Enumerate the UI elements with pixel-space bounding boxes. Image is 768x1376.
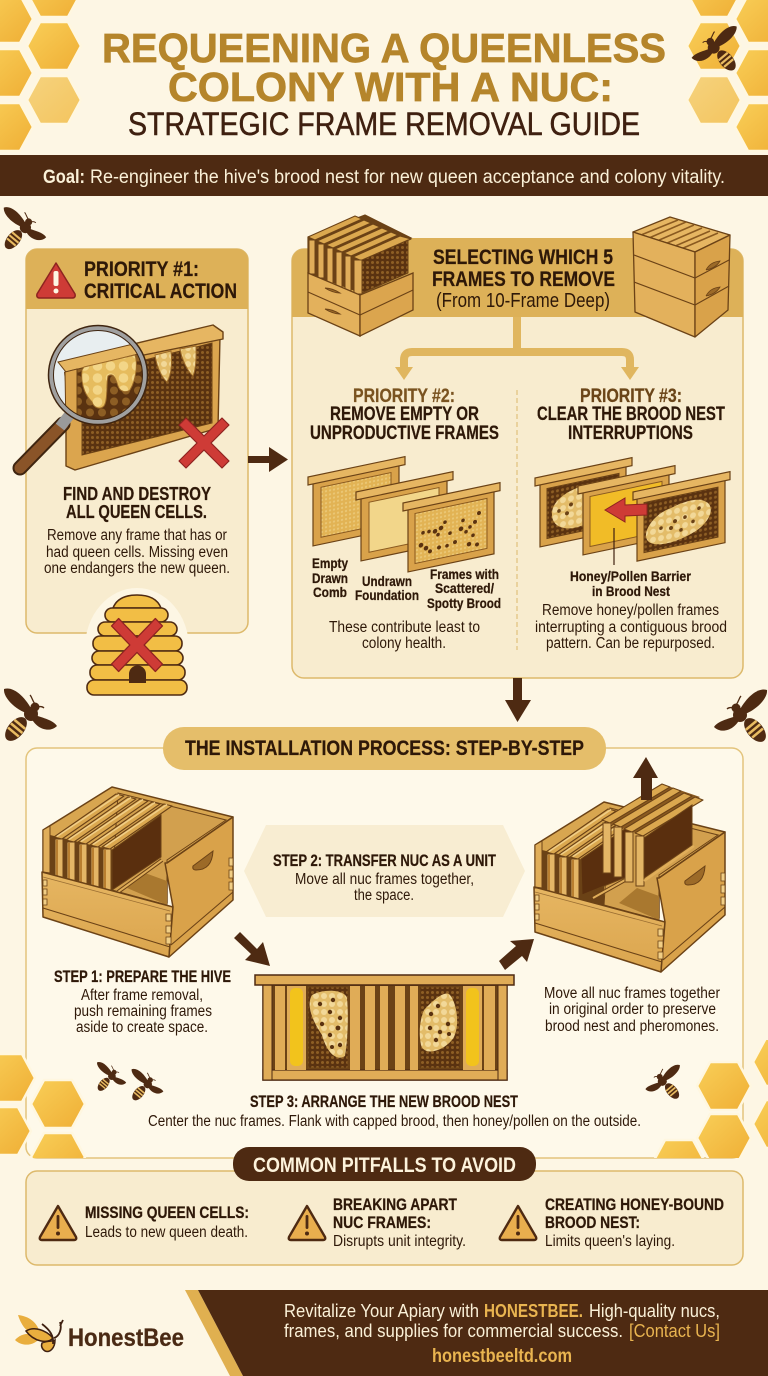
priority 2 heading: PRIORITY #2:: [353, 386, 455, 407]
priority 2 body text: These contribute least to: [329, 619, 480, 636]
header title: SELECTING WHICH 5: [433, 246, 613, 269]
honeycomb: top left: [0, 0, 81, 151]
icon: bee right lower: [645, 1065, 682, 1101]
priority 1 body text: one endangers the new queen.: [44, 560, 230, 577]
honeycomb: bottom left: [0, 1055, 86, 1158]
title: COLONY WITH A NUC:: [168, 64, 613, 110]
priority 1 body text: had queen cells. Missing even: [46, 544, 228, 561]
icon: bee left: [1, 688, 57, 745]
goal banner: [0, 155, 768, 196]
logo: HonestBee: HonestBee: [68, 1324, 184, 1352]
footer text: HONESTBEE.: [484, 1300, 583, 1321]
footer text: [284, 1300, 720, 1367]
step 3 text: [148, 1092, 641, 1130]
priority 1 body text: [44, 527, 230, 577]
panel: priority 1: [20, 249, 248, 633]
panel header: [26, 249, 248, 309]
illustration: spotty brood frame: [403, 483, 500, 573]
priority 2 frame labels: Frames with: [430, 567, 499, 582]
red arrow on barrier frame: [605, 498, 647, 522]
callout: step 2 hexagon: [244, 825, 525, 917]
priority 1 headline: [63, 483, 212, 522]
priority 3 heading: PRIORITY #3:: [580, 386, 682, 407]
title: STRATEGIC FRAME REMOVAL GUIDE: [128, 106, 640, 142]
icon: bee top right: [692, 26, 739, 74]
goal banner: Re-engineer the hive's brood nest for new queen acceptance and colony vitality.: [90, 167, 725, 188]
pitfall 1: [40, 1204, 249, 1241]
footer text: frames, and supplies for commercial success.: [284, 1320, 623, 1341]
step 3 text: Center the nuc frames. Flank with capped brood, then honey/pollen on the outside.: [148, 1113, 641, 1130]
pitfall 3: CREATING HONEY-BOUND: [545, 1196, 724, 1214]
priority 3 body text: pattern. Can be repurposed.: [546, 635, 715, 652]
title: [102, 25, 666, 142]
priority 3 caption: Honey/Pollen Barrier: [570, 569, 692, 584]
step 1 text: [54, 967, 231, 1036]
priority 1 headline: FIND AND DESTROY: [63, 483, 212, 504]
priority 3 caption: in Brood Nest: [592, 584, 670, 599]
illustration: honey barrier frame: [578, 466, 675, 556]
priority 3 body text: [535, 602, 727, 652]
step 1 text: aside to create space.: [76, 1019, 208, 1036]
header title: [432, 246, 615, 312]
priority 2 frame labels: Empty: [312, 556, 348, 571]
panel header: [292, 238, 743, 317]
priority 2 heading: REMOVE EMPTY OR: [330, 404, 479, 425]
illustration: undrawn foundation frame: [356, 472, 453, 562]
arrow: down-right to brood nest: [234, 932, 270, 966]
priority 3 heading: INTERRUPTIONS: [568, 423, 693, 444]
arrow: to selecting frames: [248, 447, 288, 472]
pitfall 1: Leads to new queen death.: [85, 1224, 248, 1241]
footer text: Revitalize Your Apiary with: [284, 1300, 479, 1321]
pitfall 2: [289, 1196, 466, 1250]
callout: step 2 hexagon: Move all nuc frames together,: [295, 871, 474, 888]
step 2 detail text: [544, 985, 720, 1035]
callout: step 2 hexagon: STEP 2: TRANSFER NUC AS A UNIT: [273, 851, 496, 870]
callout: step 2 hexagon: the space.: [354, 887, 414, 904]
panel: selecting which 5 frames: [292, 215, 743, 678]
footer text: High-quality nucs,: [589, 1300, 720, 1321]
step 2 detail text: Move all nuc frames together: [544, 985, 720, 1002]
icon: bee top left: [1, 207, 46, 252]
priority 1 heading: CRITICAL ACTION: [84, 280, 237, 303]
arrow: up-right to hive: [499, 939, 534, 970]
priority 2 body text: colony health.: [362, 635, 446, 652]
priority 2 frame labels: Spotty Brood: [427, 596, 501, 611]
illustration: step 3 hive box with lifted frames: [534, 784, 725, 972]
pitfall 2: NUC FRAMES:: [333, 1214, 431, 1232]
illustration: frame with queen cells: [58, 325, 223, 470]
arrow: down to installation: [505, 678, 531, 722]
icon: red warning triangle: [37, 263, 75, 298]
pitfall 3: BROOD NEST:: [545, 1214, 640, 1232]
illustration: empty drawn comb frame: [308, 457, 405, 547]
installation title pill: [163, 727, 606, 770]
pitfalls title pill: COMMON PITFALLS TO AVOID: [253, 1154, 516, 1177]
priority 3 heading: [537, 386, 725, 444]
priority 2 frame labels: Comb: [313, 585, 347, 600]
priority 3 caption: [570, 569, 692, 599]
priority 2 heading: [310, 386, 499, 444]
priority 2 frame labels: [312, 556, 501, 611]
honeycomb: top right: [687, 0, 768, 151]
logo: HonestBee: [15, 1315, 184, 1352]
illustration: arranged brood nest box: [255, 975, 514, 1080]
header title: FRAMES TO REMOVE: [432, 268, 615, 291]
step 3 text: STEP 3: ARRANGE THE NEW BROOD NEST: [250, 1092, 518, 1111]
priority 2 frame labels: Foundation: [355, 588, 419, 603]
icon: beehive skep with red X: [85, 588, 189, 708]
priority 1 heading: PRIORITY #1:: [84, 258, 199, 281]
icon: red X on frame: [179, 418, 229, 468]
priority 2 heading: UNPRODUCTIVE FRAMES: [310, 423, 499, 444]
pitfall 3: [500, 1196, 724, 1250]
footer banner: [185, 1290, 768, 1376]
priority 2 body text: [329, 619, 480, 652]
icon: magnifying glass: [20, 326, 150, 468]
illustration: step 1 hive box: [42, 787, 233, 957]
priority 2 frame labels: Drawn: [312, 571, 348, 586]
step 2 detail text: in original order to preserve: [549, 1001, 716, 1018]
step 1 text: push remaining frames: [74, 1003, 212, 1020]
honeycomb: bottom right: [654, 1040, 768, 1158]
illustration: stacked hive boxes: [633, 217, 730, 337]
installation title pill: THE INSTALLATION PROCESS: STEP-BY-STEP: [185, 737, 584, 760]
header title: (From 10-Frame Deep): [436, 290, 610, 312]
pitfall 2: Disrupts unit integrity.: [333, 1233, 466, 1250]
lifted nuc frames: [602, 784, 703, 886]
step 1 text: STEP 1: PREPARE THE HIVE: [54, 967, 231, 986]
priority 1 headline: ALL QUEEN CELLS.: [66, 501, 207, 522]
priority 3 body text: Remove honey/pollen frames: [542, 602, 719, 619]
pitfall 2: BREAKING APART: [333, 1196, 457, 1214]
title: REQUEENING A QUEENLESS: [102, 25, 666, 71]
pitfall 1: MISSING QUEEN CELLS:: [85, 1204, 249, 1222]
arrow: lift up: [633, 757, 658, 800]
footer text: honestbeeltd.com: [432, 1346, 572, 1367]
priority 2 frame labels: Undrawn: [362, 574, 412, 589]
panel: installation process: [0, 727, 768, 1188]
branching connector arrows: [395, 317, 639, 380]
icon: bee right: [714, 689, 768, 746]
illustration: open box with frames: [308, 215, 413, 336]
step 1 text: After frame removal,: [81, 987, 203, 1004]
pitfall 3: Limits queen's laying.: [545, 1233, 675, 1250]
pitfalls title pill: [233, 1147, 536, 1181]
priority 3 body text: interrupting a contiguous brood: [535, 619, 727, 636]
priority 1 heading: [84, 258, 237, 303]
footer text: [Contact Us]: [629, 1320, 720, 1341]
step 2 detail text: brood nest and pheromones.: [545, 1018, 719, 1035]
illustration: brood frame right: [633, 472, 730, 562]
goal banner: Goal:: [43, 167, 85, 188]
priority 1 body text: Remove any frame that has or: [47, 527, 227, 544]
panel: common pitfalls: [26, 1147, 743, 1265]
priority 2 frame labels: Scattered/: [435, 581, 494, 596]
icon: bee cluster left: [95, 1062, 163, 1103]
illustration: brood frame left: [535, 458, 632, 548]
